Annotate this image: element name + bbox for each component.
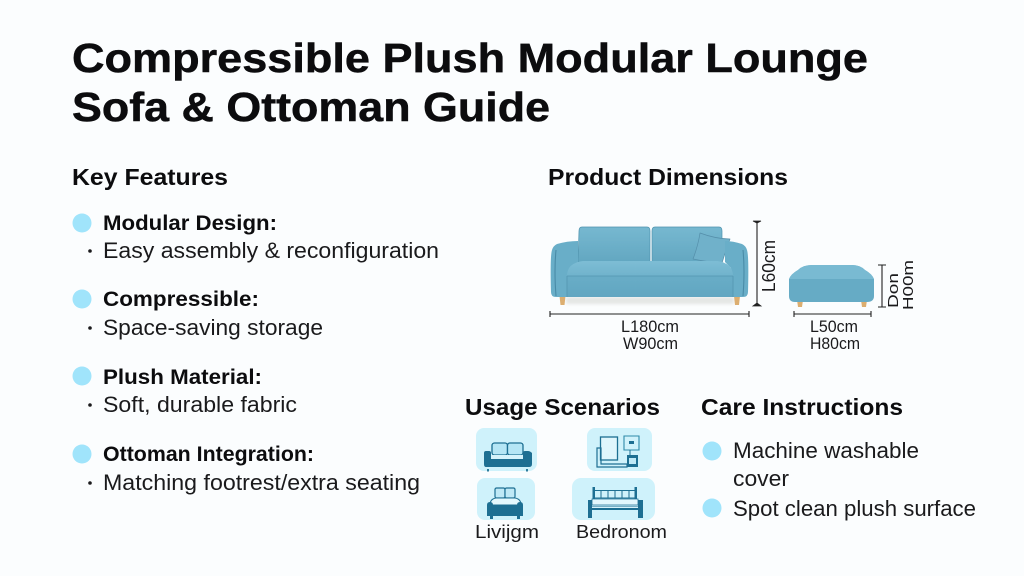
sofa illustration bbox=[551, 227, 748, 305]
care item: spot clean: Spot clean plush surface bbox=[733, 496, 976, 521]
icon: living room sofa bbox=[476, 428, 537, 472]
dimension: ottoman length and height: H80cm bbox=[810, 334, 860, 353]
heading: usage scenarios: Usage Scenarios bbox=[465, 394, 660, 420]
feature: compressible bbox=[72, 288, 323, 340]
title: Compressible Plush Modular Lounge bbox=[72, 35, 868, 81]
panel: key features bbox=[72, 164, 439, 495]
feature: modular design: Easy assembly & reconfiguration bbox=[103, 238, 439, 263]
panel: usage scenarios bbox=[465, 394, 667, 542]
feature: ottoman integration: Ottoman Integration: bbox=[103, 443, 314, 466]
dimension: sofa length and width bbox=[550, 311, 749, 353]
feature: plush material: Soft, durable fabric bbox=[103, 392, 297, 417]
feature: ottoman integration bbox=[72, 443, 420, 495]
title: Sofa & Ottoman Guide bbox=[72, 84, 550, 130]
feature: modular design bbox=[72, 212, 439, 263]
heading: product dimensions: Product Dimensions bbox=[548, 164, 788, 190]
feature: compressible: Compressible: bbox=[103, 288, 259, 311]
panel: product dimensions bbox=[548, 164, 917, 353]
feature: plush material bbox=[72, 366, 297, 417]
icon: room with screen and cabinet bbox=[587, 428, 652, 471]
label: bedroom: Bedronom bbox=[576, 522, 667, 542]
dimension: ottoman length and height bbox=[794, 311, 871, 353]
heading: key features: Key Features bbox=[72, 164, 228, 190]
dimension: ottoman height: H00m bbox=[900, 260, 917, 310]
label: living room: Livijgm bbox=[475, 522, 539, 542]
dimension: ottoman length and height: L50cm bbox=[810, 317, 858, 336]
heading: care instructions: Care Instructions bbox=[701, 394, 903, 420]
ottoman illustration bbox=[789, 265, 874, 307]
care item: machine washable: Machine washable bbox=[733, 438, 919, 463]
feature: ottoman integration: Matching footrest/extra seating bbox=[103, 470, 420, 495]
dimension: sofa height: L60cm bbox=[759, 240, 779, 292]
dimension: sofa height bbox=[753, 221, 779, 306]
dimension: ottoman height bbox=[878, 260, 917, 310]
feature: plush material: Plush Material: bbox=[103, 366, 262, 389]
care item: machine washable bbox=[702, 438, 919, 491]
dimension: ottoman height: Don bbox=[885, 273, 902, 308]
feature: modular design: Modular Design: bbox=[103, 212, 277, 235]
icon: small bed bbox=[477, 478, 535, 520]
title bbox=[72, 35, 868, 130]
dimension: sofa length and width: L180cm bbox=[621, 317, 679, 336]
feature: compressible: Space-saving storage bbox=[103, 315, 323, 340]
panel: care instructions bbox=[701, 394, 976, 521]
icon: large bed bbox=[572, 478, 655, 520]
dimension: sofa length and width: W90cm bbox=[623, 334, 678, 353]
care item: machine washable: cover bbox=[733, 466, 789, 491]
